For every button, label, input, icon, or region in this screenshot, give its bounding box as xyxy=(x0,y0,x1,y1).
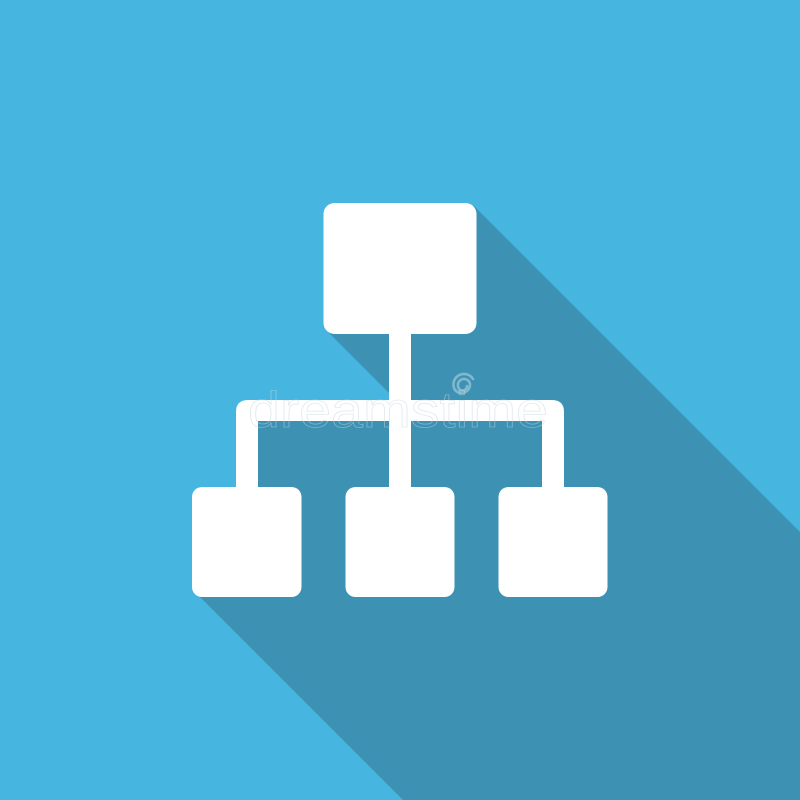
top box xyxy=(324,203,476,334)
bottom left box xyxy=(192,487,302,597)
connector lines xyxy=(236,330,564,490)
watermark text: dreamstime xyxy=(248,382,548,438)
bottom right box xyxy=(498,487,608,597)
icon: hierarchy chart xyxy=(192,203,608,597)
long diagonal shadow xyxy=(195,206,800,800)
watermark spiral xyxy=(453,374,473,393)
bottom centre box xyxy=(346,487,454,597)
